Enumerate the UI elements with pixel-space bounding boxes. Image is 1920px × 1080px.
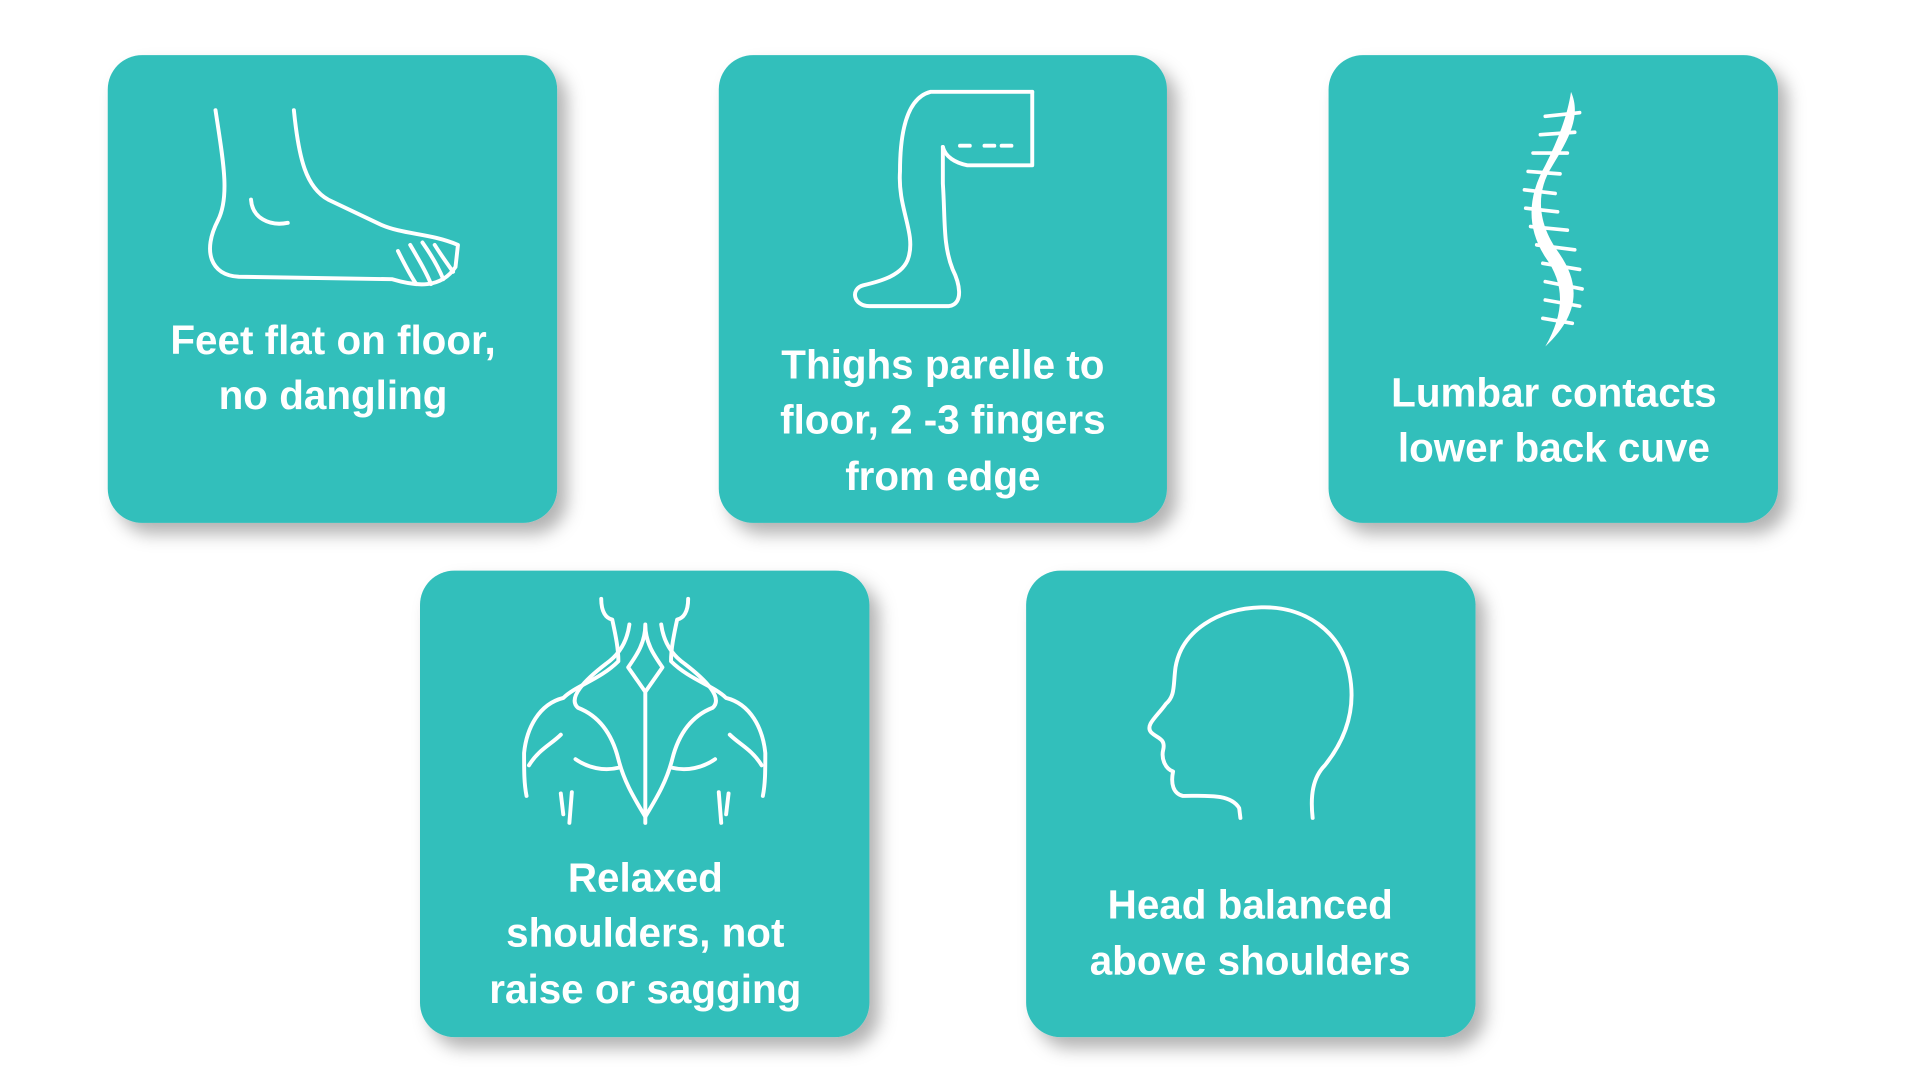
icon: leg (855, 92, 1032, 306)
text: thighs: Thighs parelle to (781, 341, 1104, 387)
text: head: Head balanced (1108, 881, 1393, 927)
card: lumbar: lower back cuve (1398, 425, 1710, 471)
text: shoulders: Relaxed (568, 854, 723, 900)
card: thighs: floor, 2 -3 fingers (780, 396, 1106, 442)
icon: shoulders (524, 599, 765, 823)
card: feet (108, 55, 557, 523)
card: thighs: from edge (845, 453, 1040, 499)
card: shoulders: raise or sagging (489, 966, 801, 1012)
card: feet: no dangling (219, 372, 447, 418)
card: thighs (719, 55, 1167, 523)
icon: spine (1524, 92, 1582, 347)
text: feet: Feet flat on floor, (170, 317, 496, 363)
card: lumbar (1329, 55, 1778, 523)
icon: head (1149, 607, 1352, 818)
text: lumbar: Lumbar contacts (1391, 370, 1717, 416)
icon: foot (210, 110, 458, 284)
card: head: above shoulders (1090, 938, 1411, 984)
card: head (1026, 571, 1476, 1037)
card: shoulders (420, 571, 869, 1037)
card: shoulders: shoulders, not (506, 910, 784, 956)
